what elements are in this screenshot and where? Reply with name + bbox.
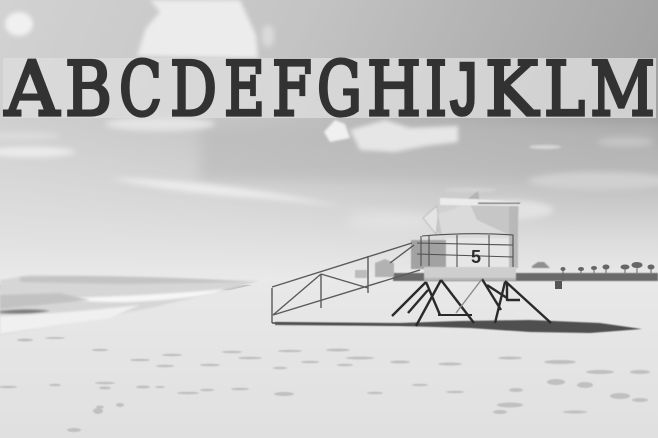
cabin <box>411 191 520 281</box>
alphabet title: I <box>425 45 447 133</box>
number 5: 5 <box>471 247 481 267</box>
alphabet title: F <box>272 45 312 133</box>
alphabet title: K <box>485 45 540 133</box>
distant shoreline with buildings and palm trees <box>355 259 658 289</box>
railing <box>417 234 513 267</box>
alphabet title: E <box>224 45 265 133</box>
alphabet title: H <box>367 45 421 133</box>
ramp <box>272 243 420 325</box>
alphabet title: C <box>119 45 162 133</box>
alphabet title: J <box>449 44 478 132</box>
ocean waves <box>0 275 260 335</box>
tower shadow <box>275 320 642 333</box>
beach sand <box>0 281 658 438</box>
sky background <box>0 0 658 290</box>
alphabet title: L <box>544 45 585 133</box>
alphabet title: D <box>170 45 217 133</box>
lifeguard tower 5 <box>272 191 551 326</box>
alphabet title: B <box>65 45 112 133</box>
alphabet title <box>4 44 655 133</box>
legs <box>392 279 551 326</box>
title band <box>3 58 656 118</box>
alphabet title: G <box>317 45 362 133</box>
alphabet title: A <box>4 45 60 133</box>
footprints in the sand <box>0 337 650 432</box>
clouds <box>0 0 658 231</box>
